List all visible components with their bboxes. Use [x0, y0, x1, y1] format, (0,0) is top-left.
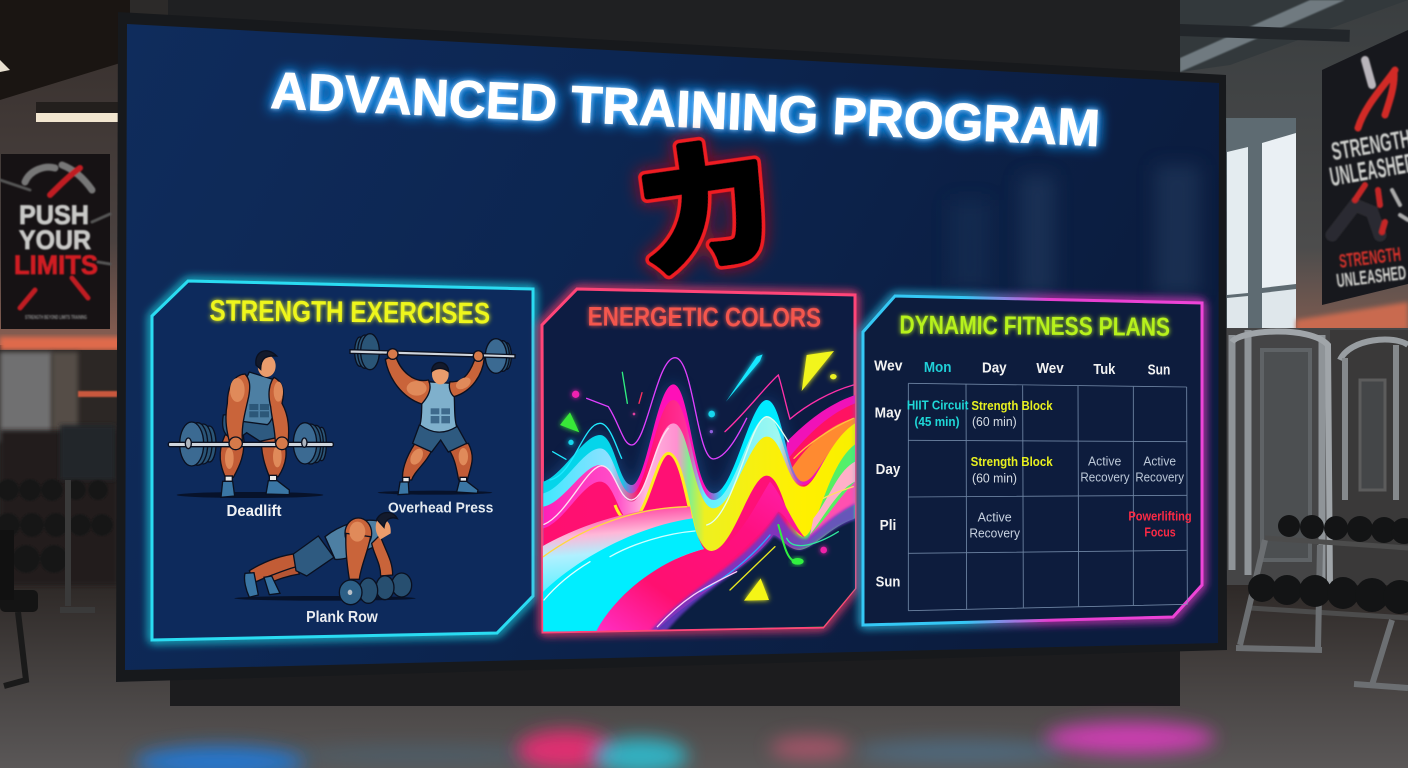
- column headers: Day: [982, 361, 1007, 377]
- kanji emblem: 力: [626, 96, 781, 300]
- poster: push your limits: [0, 154, 110, 329]
- panel frame: [152, 281, 533, 640]
- row headers: Day: [876, 462, 901, 478]
- poster text: PUSH: [19, 200, 89, 230]
- neon wave art: [542, 351, 855, 633]
- cyan arc: [542, 518, 704, 633]
- cell: powerlifting focus: Powerlifting: [1128, 510, 1192, 524]
- dumbbell rack left: [0, 425, 118, 610]
- wall above screen: [168, 0, 1180, 75]
- rack legs: [1236, 540, 1408, 688]
- column headers: Tuk: [1093, 362, 1116, 378]
- rack stand: [60, 480, 95, 610]
- cell: active recovery sun: [1135, 455, 1185, 485]
- cell: powerlifting focus: Focus: [1144, 526, 1176, 540]
- neon lines: [543, 358, 853, 627]
- rows: [0, 479, 113, 573]
- schedule grid: [908, 383, 1187, 611]
- bezel: [116, 12, 1227, 682]
- floor reflections: [135, 722, 1215, 768]
- poster text: STRENGTH BEYOND LIMITS TRAINING: [25, 315, 87, 321]
- cell: strength block row 2: (60 min): [972, 471, 1017, 485]
- small red strip: [78, 391, 118, 397]
- ceiling light left: [36, 113, 120, 122]
- lower red arc: [595, 482, 805, 633]
- poster text: YOUR: [19, 225, 91, 255]
- bottom left pink-to-cyan arc: [542, 507, 704, 633]
- small corner light: [0, 60, 10, 72]
- cell: active recovery thu: Active: [1088, 455, 1121, 469]
- cell: active recovery wed: Active: [978, 510, 1012, 524]
- figure: overhead press: [350, 334, 515, 495]
- figure: deadlift: [168, 351, 333, 498]
- display screen: [116, 12, 1227, 682]
- poster art: [1332, 60, 1408, 235]
- panel: dynamic fitness plans: [863, 296, 1202, 625]
- triangle yellow top: [802, 351, 834, 391]
- screen stand: [170, 640, 1180, 706]
- column headers: Wev: [1036, 361, 1064, 377]
- triangle green: [560, 412, 579, 432]
- left accent strip: [0, 337, 125, 351]
- dark lower right backdrop: [653, 518, 855, 633]
- cell: strength block row 1: [971, 399, 1054, 429]
- poster text: [14, 200, 98, 321]
- window pane 3: [1227, 296, 1248, 330]
- right accent strip: [1296, 302, 1408, 333]
- column headers: Sun: [1148, 363, 1170, 379]
- left ceiling: [0, 0, 130, 100]
- row headers: Sun: [876, 575, 900, 591]
- duct: [1180, 0, 1345, 72]
- lower left bright wall: [0, 352, 52, 442]
- cable machines right: [1232, 330, 1408, 590]
- right pink stream: [807, 482, 855, 543]
- cell: HIIT circuit: (45 min): [914, 415, 959, 429]
- screen surface: [125, 24, 1219, 670]
- row headers: [875, 405, 902, 591]
- floor: [0, 585, 1408, 768]
- wave layer D: [543, 444, 855, 632]
- wave layer C: [543, 423, 855, 632]
- poster: strength unleashed: [1322, 30, 1408, 305]
- right pale stream: [810, 462, 855, 535]
- panel heading: DYNAMIC FITNESS PLANS: [899, 309, 1170, 342]
- panel: strength exercises: [152, 281, 533, 640]
- upper right stream: [786, 395, 855, 458]
- lower right dim: [1330, 330, 1408, 600]
- cell: HIIT circuit: HIIT Circuit: [907, 398, 969, 412]
- label: overhead press: Overhead Press: [388, 501, 493, 517]
- cell: strength block row 1: (60 min): [972, 415, 1017, 429]
- cell: active recovery wed: Recovery: [969, 527, 1021, 541]
- panel frame: [863, 296, 1202, 625]
- lower right room: [1226, 328, 1408, 600]
- column headers: Mon: [924, 360, 952, 376]
- left wall: [0, 0, 130, 345]
- lower left column: [52, 352, 78, 442]
- triangle yellow bottom: [744, 578, 769, 601]
- wave layer A: [543, 384, 855, 632]
- kanji emblem: 力: [626, 96, 781, 300]
- cell: HIIT circuit: [907, 398, 969, 429]
- cell: strength block row 2: Strength Block: [971, 455, 1054, 469]
- right ceiling: [1180, 0, 1408, 72]
- window pane 1: [1227, 147, 1248, 295]
- lower left room: [0, 350, 125, 590]
- faint reflections: [950, 165, 1200, 295]
- row headers: Pli: [880, 518, 896, 534]
- label: plank row: Plank Row: [306, 609, 378, 626]
- cell: active recovery sun: Active: [1143, 455, 1176, 469]
- bench left: [0, 530, 38, 686]
- panel: energetic colors: [542, 289, 855, 633]
- yellow outline: [615, 453, 700, 545]
- right wall: [1180, 0, 1408, 330]
- column headers: Wev: [874, 359, 903, 375]
- cell: active recovery thu: Recovery: [1080, 471, 1130, 485]
- purple fade arc: [648, 503, 855, 633]
- panel heading: ENERGETIC COLORS: [588, 302, 821, 333]
- cell: active recovery sun: Recovery: [1135, 471, 1185, 485]
- rack shelves: [1250, 538, 1408, 618]
- rack uprights: [60, 425, 115, 480]
- label: deadlift: Deadlift: [226, 503, 281, 520]
- title: ADVANCED TRAINING PROGRAM: [269, 62, 1101, 158]
- cell: active recovery wed: [969, 510, 1021, 541]
- streak cyan: [726, 354, 763, 402]
- dots: [568, 374, 837, 553]
- wave layer B: [543, 400, 819, 632]
- cell: strength block row 2: [971, 455, 1054, 485]
- wave glow: [542, 380, 793, 556]
- dumbbells: [1248, 515, 1408, 614]
- window pane 4: [1262, 289, 1296, 330]
- window frame: [1226, 118, 1296, 333]
- window pane 2: [1262, 133, 1296, 288]
- ceiling light fixture: [36, 102, 120, 113]
- poster text: LIMITS: [14, 250, 98, 280]
- blob green: [792, 558, 804, 565]
- cell: strength block row 1: Strength Block: [971, 399, 1054, 413]
- poster figure: [0, 165, 110, 308]
- ceiling pipe: [1180, 24, 1350, 42]
- figure: plank row: [234, 512, 416, 605]
- column headers: [874, 359, 1170, 379]
- panel heading: STRENGTH EXERCISES: [209, 295, 490, 331]
- row headers: May: [875, 405, 902, 421]
- cell: active recovery thu: [1080, 455, 1130, 485]
- panel frame: [542, 289, 855, 632]
- dumbbell rack right: [1236, 515, 1408, 688]
- cell: powerlifting focus: [1128, 510, 1192, 540]
